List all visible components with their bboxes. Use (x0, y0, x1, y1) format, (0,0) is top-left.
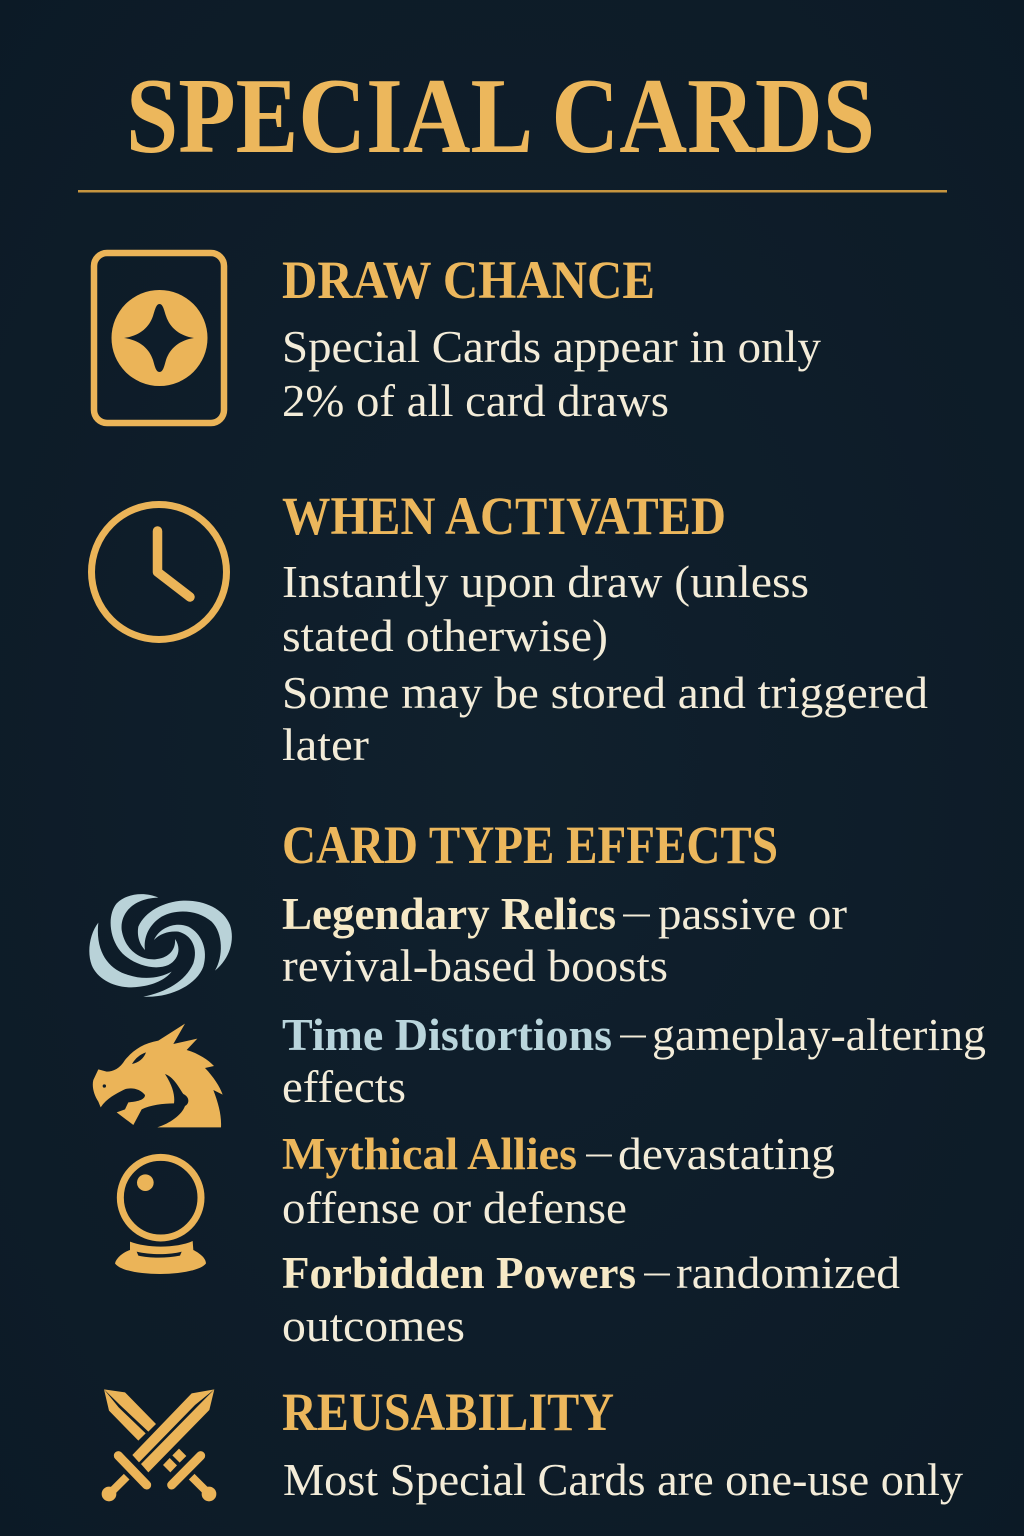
entry: mythical allies: devastating (618, 1128, 835, 1179)
icon: swirl (89, 894, 232, 997)
section: draw chance: DRAW CHANCE (282, 250, 655, 310)
entry: forbidden powers: randomized (676, 1247, 900, 1298)
entry: legendary relics: Legendary Relics (282, 889, 616, 939)
icon: clock (92, 504, 226, 640)
icon: card with star (94, 253, 224, 423)
entry: legendary relics (282, 888, 847, 991)
entry: legendary relics: revival-based boosts (282, 940, 668, 991)
section: when activated (282, 486, 928, 770)
section: when activated: stated otherwise) (282, 610, 608, 661)
section: reusability: REUSABILITY (282, 1382, 614, 1442)
section: draw chance (282, 250, 821, 426)
section: when activated: WHEN ACTIVATED (282, 486, 726, 546)
entry: mythical allies (282, 1128, 835, 1233)
entry: mythical allies: Mythical Allies (282, 1129, 577, 1179)
section: card type effects: CARD TYPE EFFECTS (282, 815, 778, 875)
section: reusability (282, 1382, 963, 1505)
entry: time distortions (282, 1009, 986, 1112)
icon: dragon (93, 1024, 223, 1127)
section: when activated: Instantly upon draw (unless (282, 556, 809, 607)
entry: forbidden powers (282, 1247, 900, 1351)
section: when activated: Some may be stored and triggered (282, 667, 928, 718)
entry: legendary relics: passive or (658, 888, 847, 939)
entry: time distortions: effects (282, 1061, 406, 1112)
title: SPECIAL CARDS (126, 57, 875, 176)
entry: time distortions: Time Distortions (282, 1010, 612, 1060)
entry: forbidden powers: outcomes (282, 1300, 465, 1351)
section: draw chance: Special Cards appear in only (282, 321, 821, 372)
entry: time distortions: gameplay-altering (652, 1009, 986, 1060)
section: card type effects (282, 815, 986, 1351)
section: reusability: Most Special Cards are one-use only (283, 1454, 963, 1505)
entry: forbidden powers: Forbidden Powers (282, 1248, 636, 1298)
section: when activated: later (282, 719, 369, 770)
icon: crossed swords (102, 1389, 216, 1501)
entry: mythical allies: offense or defense (282, 1182, 627, 1233)
section: draw chance: 2% of all card draws (282, 375, 669, 426)
icon: crystal orb (115, 1157, 206, 1274)
